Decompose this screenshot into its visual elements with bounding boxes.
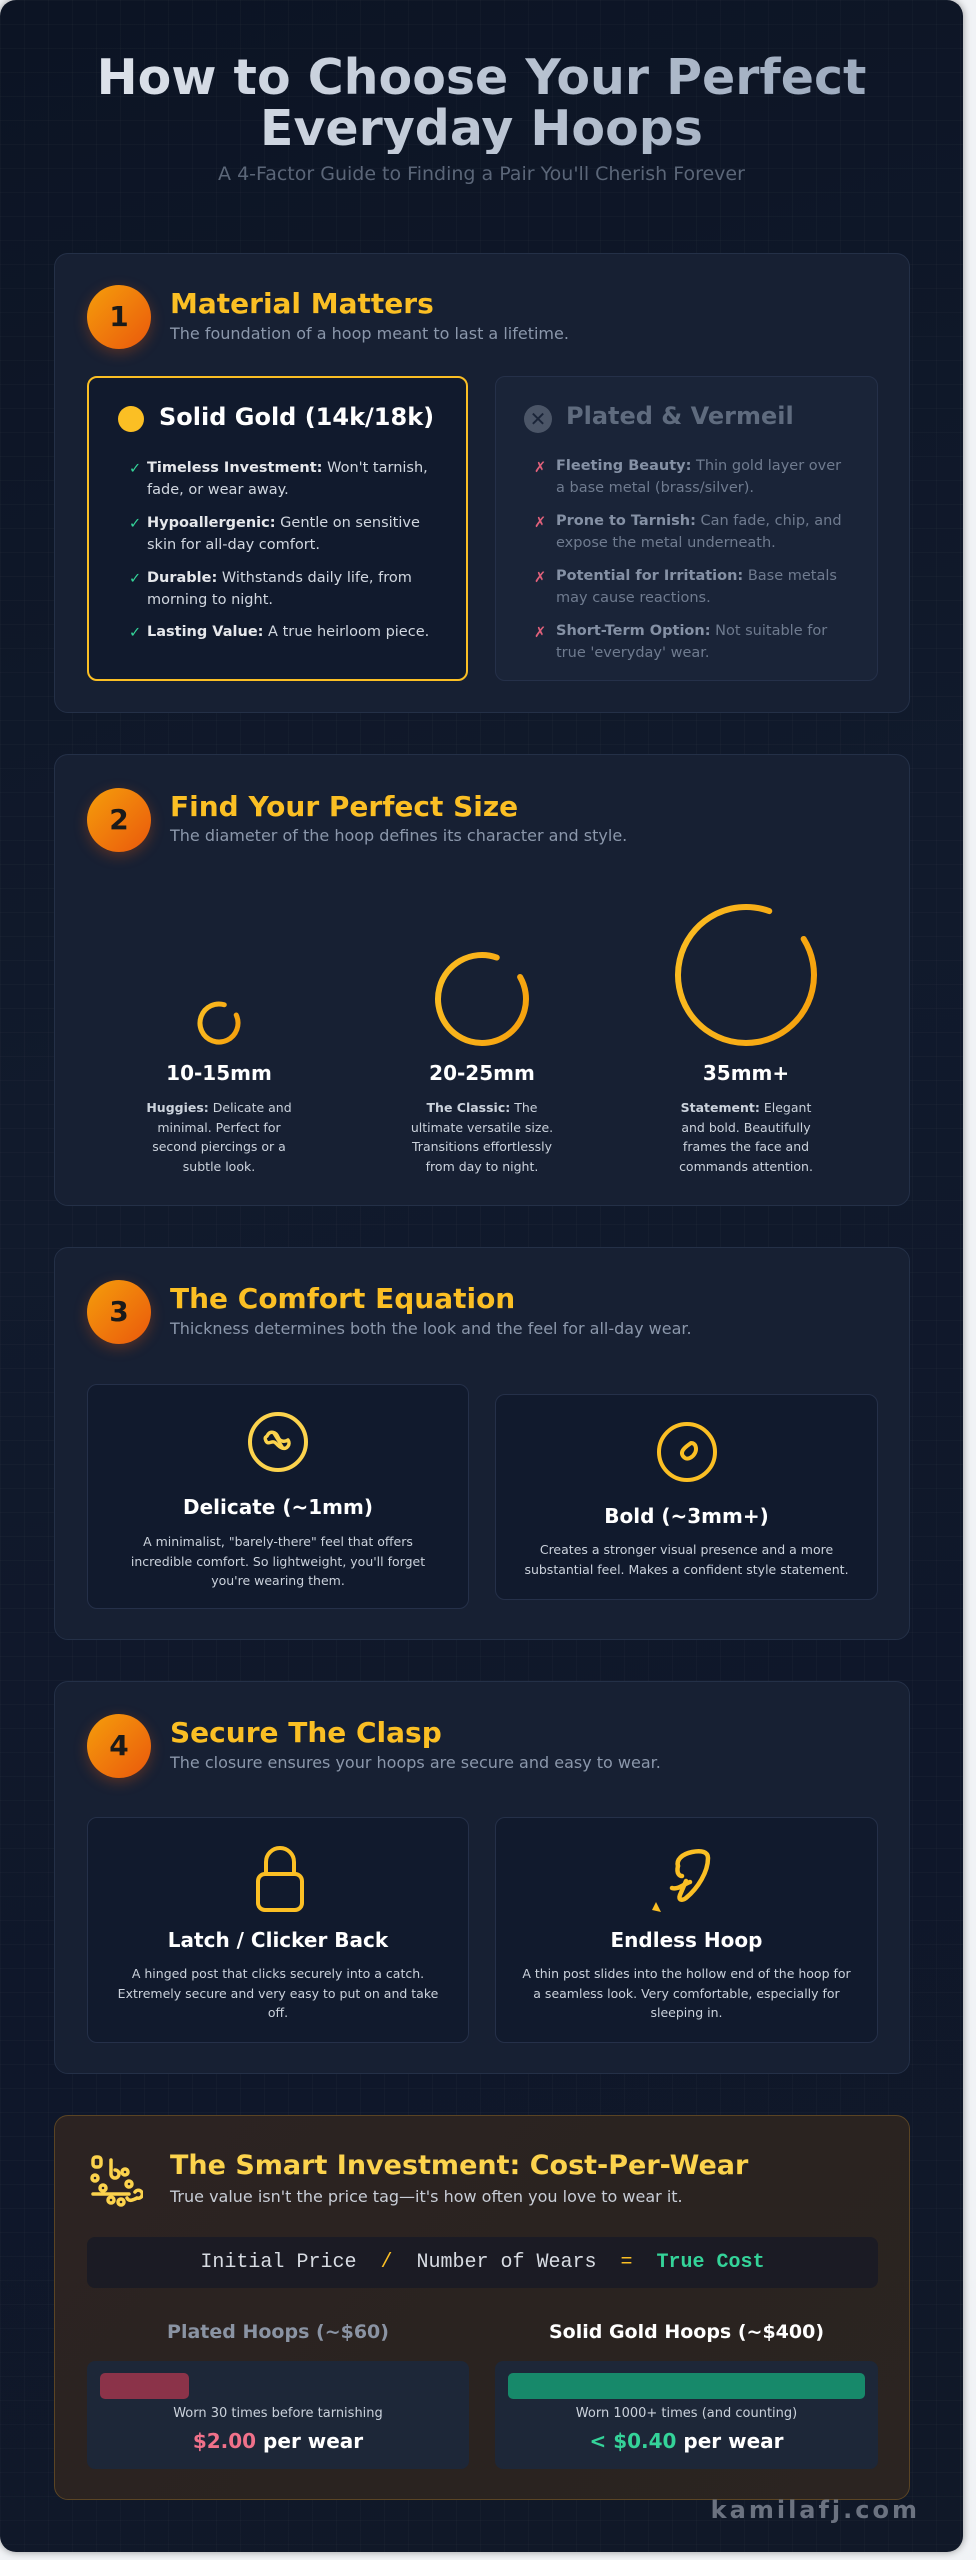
- badge 4: [87, 1714, 151, 1778]
- card: bold: [495, 1394, 878, 1600]
- desc: Creates a stronger visual presence and a more substantial feel. Makes a confident style statement.: [524, 1542, 849, 1576]
- bar: gold: [508, 2373, 865, 2399]
- list: ✗: [534, 570, 546, 586]
- size 1: Huggies: Delicate and minimal. Perfect for second piercings or a subtle look.: [146, 1100, 292, 1174]
- icon: bold ring: [657, 1422, 717, 1482]
- panel: comfort: [54, 1247, 910, 1640]
- desc: A hinged post that clicks securely into a catch. Extremely secure and very easy to put on and take off.: [118, 1966, 438, 2020]
- list: ✓: [129, 571, 141, 587]
- subtitle: A 4-Factor Guide to Finding a Pair You'll Cherish Forever: [218, 163, 745, 185]
- card: endless: [495, 1817, 878, 2043]
- comparison: plated: $2.00 per wear: [193, 2429, 363, 2453]
- subheading: The closure ensures your hoops are secure and easy to wear.: [170, 1753, 661, 1772]
- comparison: plated: Worn 30 times before tarnishing: [173, 2406, 383, 2421]
- desc: A minimalist, "barely-there" feel that offers incredible comfort. So lightweight, you'll forget you're wearing them.: [131, 1534, 425, 1588]
- card: solid gold: [87, 376, 468, 681]
- list: ✓: [129, 625, 141, 641]
- comparison: solid gold: Solid Gold Hoops (~$400): [549, 2321, 824, 2343]
- heading: Find Your Perfect Size: [170, 790, 518, 823]
- subheading: The foundation of a hoop meant to last a lifetime.: [170, 324, 569, 343]
- list: Hypoallergenic: Gentle on sensitive skin for all-day comfort.: [147, 515, 420, 553]
- title: How to Choose Your Perfect: [97, 49, 866, 106]
- formula: [87, 2237, 878, 2288]
- hoop sizes chart: [197, 904, 817, 1046]
- title: Everyday Hoops: [260, 100, 703, 157]
- desc: A thin post slides into the hollow end of the hoop for a seamless look. Very comfortable, especially for sleeping in.: [522, 1966, 851, 2020]
- badge 4: 4: [109, 1729, 129, 1762]
- x icon: ✕: [530, 407, 546, 431]
- badge 2: [87, 788, 151, 852]
- panel: size: [54, 754, 910, 1206]
- size 2: [411, 1061, 553, 1174]
- gold dot icon: [118, 406, 144, 432]
- comparison: solid gold: Worn 1000+ times (and counting): [576, 2406, 797, 2421]
- bar: plated: [100, 2373, 189, 2399]
- title: Delicate (~1mm): [183, 1495, 373, 1519]
- icon: endless hoop: [652, 1849, 710, 1912]
- size 3: Statement: Elegant and bold. Beautifully frames the face and commands attention.: [679, 1100, 813, 1174]
- large hoop: [652, 881, 840, 1069]
- subheading: The diameter of the hoop defines its character and style.: [170, 826, 627, 845]
- card title: Plated & Vermeil: [566, 402, 794, 430]
- title: Endless Hoop: [611, 1928, 762, 1952]
- list: ✓: [129, 516, 141, 532]
- title: [0, 52, 963, 154]
- list: ✓: [129, 461, 141, 477]
- comparison: plated: [87, 2321, 469, 2469]
- list: Timeless Investment: Won't tarnish, fade, or wear away.: [147, 460, 428, 498]
- comparison: plated: Plated Hoops (~$60): [167, 2321, 389, 2343]
- icon: delicate ring: [248, 1412, 308, 1472]
- list: Durable: Withstands daily life, from morning to night.: [147, 570, 412, 608]
- comparison: solid gold: < $0.40 per wear: [589, 2429, 784, 2453]
- size 1: 10-15mm: [166, 1061, 272, 1085]
- panel: clasp: [54, 1681, 910, 2074]
- card: delicate: [87, 1384, 469, 1609]
- icon: lock: [256, 1846, 304, 1912]
- subheading: True value isn't the price tag—it's how often you love to wear it.: [170, 2187, 683, 2206]
- badge 3: [87, 1280, 151, 1344]
- comparison: solid gold: [495, 2321, 878, 2469]
- medium hoop: [422, 939, 542, 1059]
- badge 1: 1: [109, 300, 129, 333]
- list: Prone to Tarnish: Can fade, chip, and expose the metal underneath.: [556, 513, 842, 551]
- title: Bold (~3mm+): [604, 1504, 769, 1528]
- list: ✗: [534, 460, 546, 476]
- x icon: [524, 405, 552, 433]
- heading: Secure The Clasp: [170, 1716, 442, 1749]
- size 2: 20-25mm: [429, 1061, 535, 1085]
- size 3: 35mm+: [703, 1061, 789, 1085]
- formula: Initial Price / Number of Wears = True Cost: [200, 2251, 765, 2274]
- list: Short-Term Option: Not suitable for true 'everyday' wear.: [556, 623, 827, 661]
- panel: material matters: [54, 253, 910, 713]
- small hoop: [194, 998, 244, 1048]
- list: Lasting Value: A true heirloom piece.: [147, 624, 429, 640]
- list: Fleeting Beauty: Thin gold layer over a base metal (brass/silver).: [556, 458, 841, 496]
- heading: The Smart Investment: Cost-Per-Wear: [170, 2150, 748, 2181]
- card title: Solid Gold (14k/18k): [159, 403, 434, 431]
- list: Potential for Irritation: Base metals may cause reactions.: [556, 568, 837, 606]
- panel: cost per wear: [54, 2115, 910, 2500]
- list: ✗: [534, 515, 546, 531]
- badge 2: 2: [109, 803, 129, 836]
- size 3: [679, 1061, 813, 1174]
- list: [129, 460, 429, 641]
- badge 1: [87, 285, 151, 349]
- size 1: [146, 1061, 292, 1174]
- subheading: Thickness determines both the look and the feel for all-day wear.: [170, 1319, 692, 1338]
- list: ✗: [534, 625, 546, 641]
- icon: coins: [90, 2155, 143, 2207]
- size 2: The Classic: The ultimate versatile size. Transitions effortlessly from day to night.: [411, 1100, 553, 1174]
- heading: Material Matters: [170, 287, 434, 320]
- list: [534, 458, 842, 661]
- footer brand: kamilafj.com: [711, 2496, 920, 2524]
- card: plated: [495, 376, 878, 681]
- title: Latch / Clicker Back: [168, 1928, 388, 1952]
- heading: The Comfort Equation: [170, 1282, 515, 1315]
- card: latch: [87, 1817, 469, 2043]
- badge 3: 3: [109, 1295, 129, 1328]
